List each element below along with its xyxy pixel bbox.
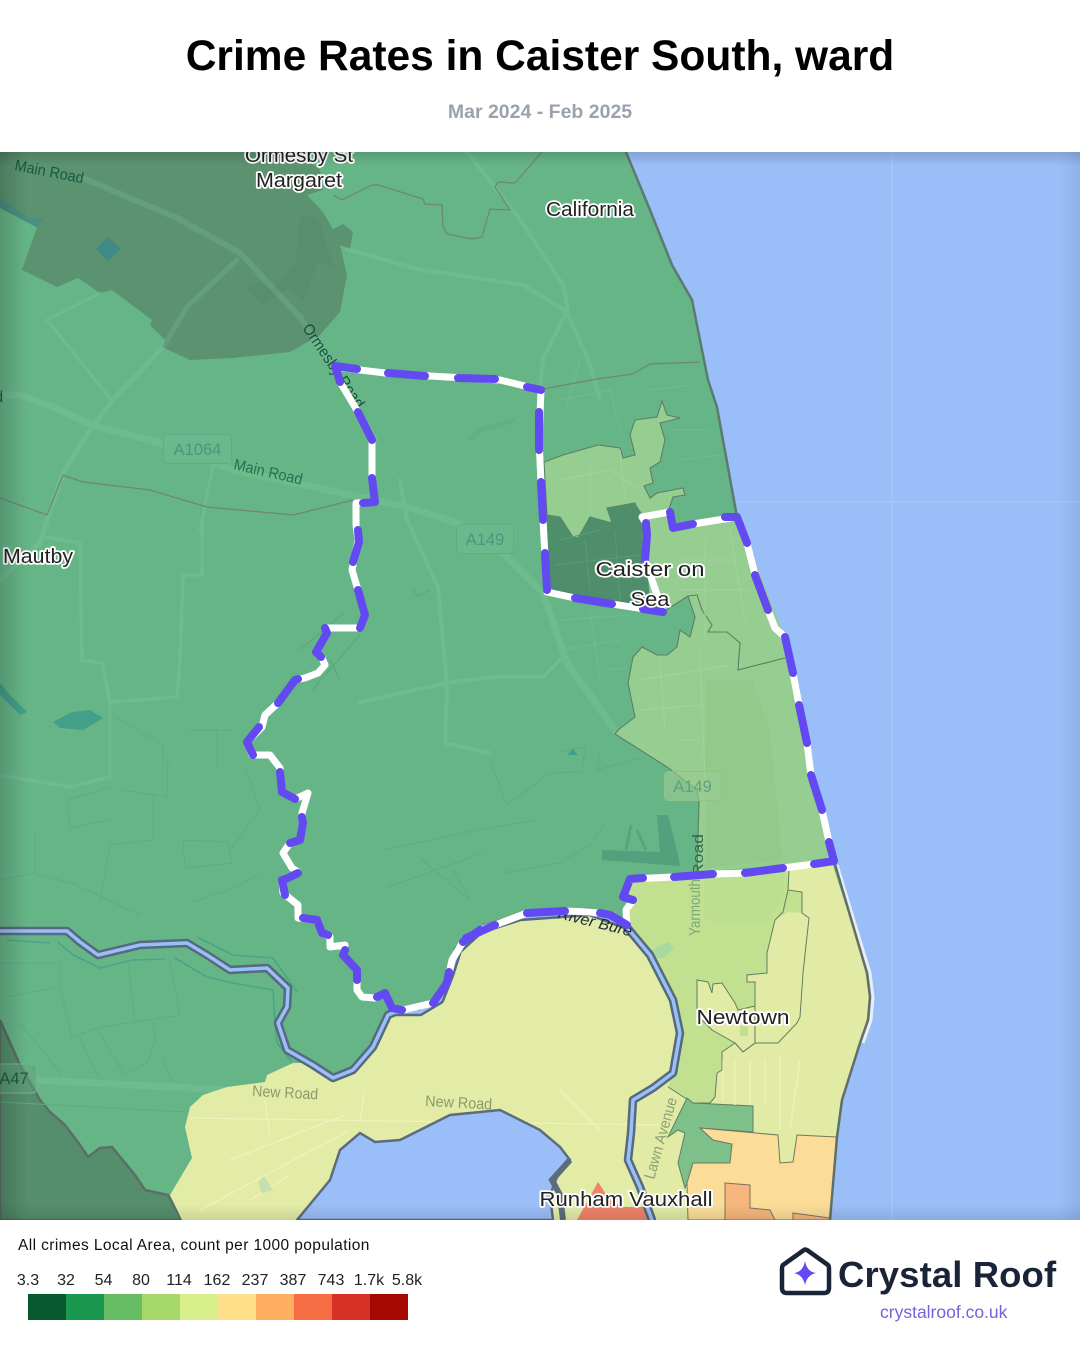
wood patch: [470, 420, 515, 440]
title: Crime Rates in Caister South, ward: [186, 33, 894, 80]
lime area outlines: [668, 870, 809, 1103]
area: yellow Newtown pocket: [697, 980, 755, 1052]
legend: 162: [204, 1272, 230, 1289]
label: Road: Road: [691, 834, 707, 876]
road shield: A47: A47: [0, 1070, 29, 1088]
marsh patch: [602, 815, 680, 866]
area: dark green Caister core: [546, 503, 663, 612]
area: dark green south-west: [0, 1020, 182, 1220]
area: pale yellow central marsh: [170, 912, 680, 1220]
icon: house with star: [780, 1247, 832, 1296]
lime patch inside Newtown pocket: [740, 1026, 748, 1036]
area: mid green south: [668, 1098, 753, 1188]
label: Main Road north: Main Road: [13, 157, 85, 187]
south-east coastline: [830, 861, 870, 1220]
legend: 32: [57, 1272, 75, 1289]
label: California: California: [546, 198, 635, 221]
road shield: A149 south: A149: [673, 778, 712, 796]
legend: 114: [166, 1272, 192, 1289]
legend: [17, 1237, 422, 1320]
label: Yarmouth: Yarmouth: [687, 879, 704, 936]
label: Lawn Avenue: Lawn Avenue: [642, 1096, 681, 1181]
roads: [0, 152, 617, 1130]
road shield: A149 north: A149: [466, 531, 504, 549]
legend value labels: [17, 1272, 422, 1289]
logo wordmark: Crystal Roof: [838, 1254, 1056, 1295]
residential street pattern: [560, 450, 750, 780]
legend colour scale: [28, 1294, 408, 1320]
label: Newtown: Newtown: [696, 1006, 790, 1029]
logo url: crystalroof.co.uk: [880, 1302, 1007, 1322]
lower water: [297, 1110, 570, 1220]
label: New Road west: New Road: [252, 1083, 319, 1103]
legend: 237: [242, 1272, 268, 1289]
area: red block: [577, 1182, 653, 1220]
label: Margaret: Margaret: [256, 169, 342, 192]
subtle inner blocks east coast: [705, 680, 782, 868]
label: Main Road central: Main Road: [232, 456, 304, 489]
legend: 5.8k: [392, 1272, 422, 1289]
subtitle: date range: Mar 2024 - Feb 2025: [448, 101, 632, 123]
place labels: [3, 144, 790, 1211]
base land area: [0, 152, 1080, 1220]
pond: [567, 749, 578, 755]
road labels: [0, 157, 707, 1181]
legend title: All crimes Local Area, count per 1000 population: [18, 1237, 370, 1254]
legend: 743: [318, 1272, 344, 1289]
legend: 80: [132, 1272, 150, 1289]
side drains along river: [7, 937, 297, 1062]
label: River Bure: River Bure: [556, 905, 634, 940]
label: Caister on: Caister on: [596, 558, 704, 581]
area: lime green south-east: [627, 870, 802, 1103]
area: pale yellow south-east: [627, 862, 870, 1220]
field boundaries: [0, 587, 640, 1112]
sea grid lines: [738, 152, 1080, 1220]
road shield: A149 south: [664, 772, 722, 800]
area: light green east coast: [615, 516, 834, 872]
road shield: A1064: A1064: [174, 441, 221, 459]
ward boundary: purple dashes: [247, 366, 834, 1010]
legend: 387: [280, 1272, 306, 1289]
lake: [53, 710, 103, 730]
pond lime: [652, 942, 674, 958]
ward boundary lines: [0, 152, 700, 515]
area: dark green north-west: [0, 152, 353, 360]
white beach strip: [837, 865, 873, 1043]
river channel south: [552, 1160, 570, 1220]
label: Sea: Sea: [630, 588, 670, 611]
label: Runham Vauxhall: Runham Vauxhall: [540, 1188, 712, 1211]
label: Mautby: Mautby: [3, 545, 74, 568]
area: orange blocks: [725, 1183, 830, 1220]
legend: 3.3: [17, 1272, 39, 1289]
area: peach south: [687, 1128, 837, 1220]
area: light green north pocket: [544, 401, 685, 538]
river Bure: [0, 912, 680, 1220]
sea: [626, 152, 1080, 1220]
road shield: A47: [0, 1064, 37, 1093]
street pattern in yellow areas: [190, 1055, 800, 1210]
label: Ormesby: Ormesby Road: [299, 321, 368, 411]
logo: Crystal Roof: [780, 1247, 1056, 1322]
dark patches north-west: [96, 237, 121, 261]
road shield: A1064: [164, 434, 232, 464]
legend: 1.7k: [354, 1272, 384, 1289]
light green ward areas: [544, 401, 834, 872]
map edge shading: [0, 152, 1080, 1220]
ward boundary: white base: [247, 367, 834, 1010]
map panel: [0, 152, 1080, 1220]
label: New Road east: New Road: [425, 1093, 493, 1114]
road shield: A149 north: [456, 524, 514, 554]
legend: 54: [95, 1272, 112, 1289]
coastline: [626, 152, 737, 517]
